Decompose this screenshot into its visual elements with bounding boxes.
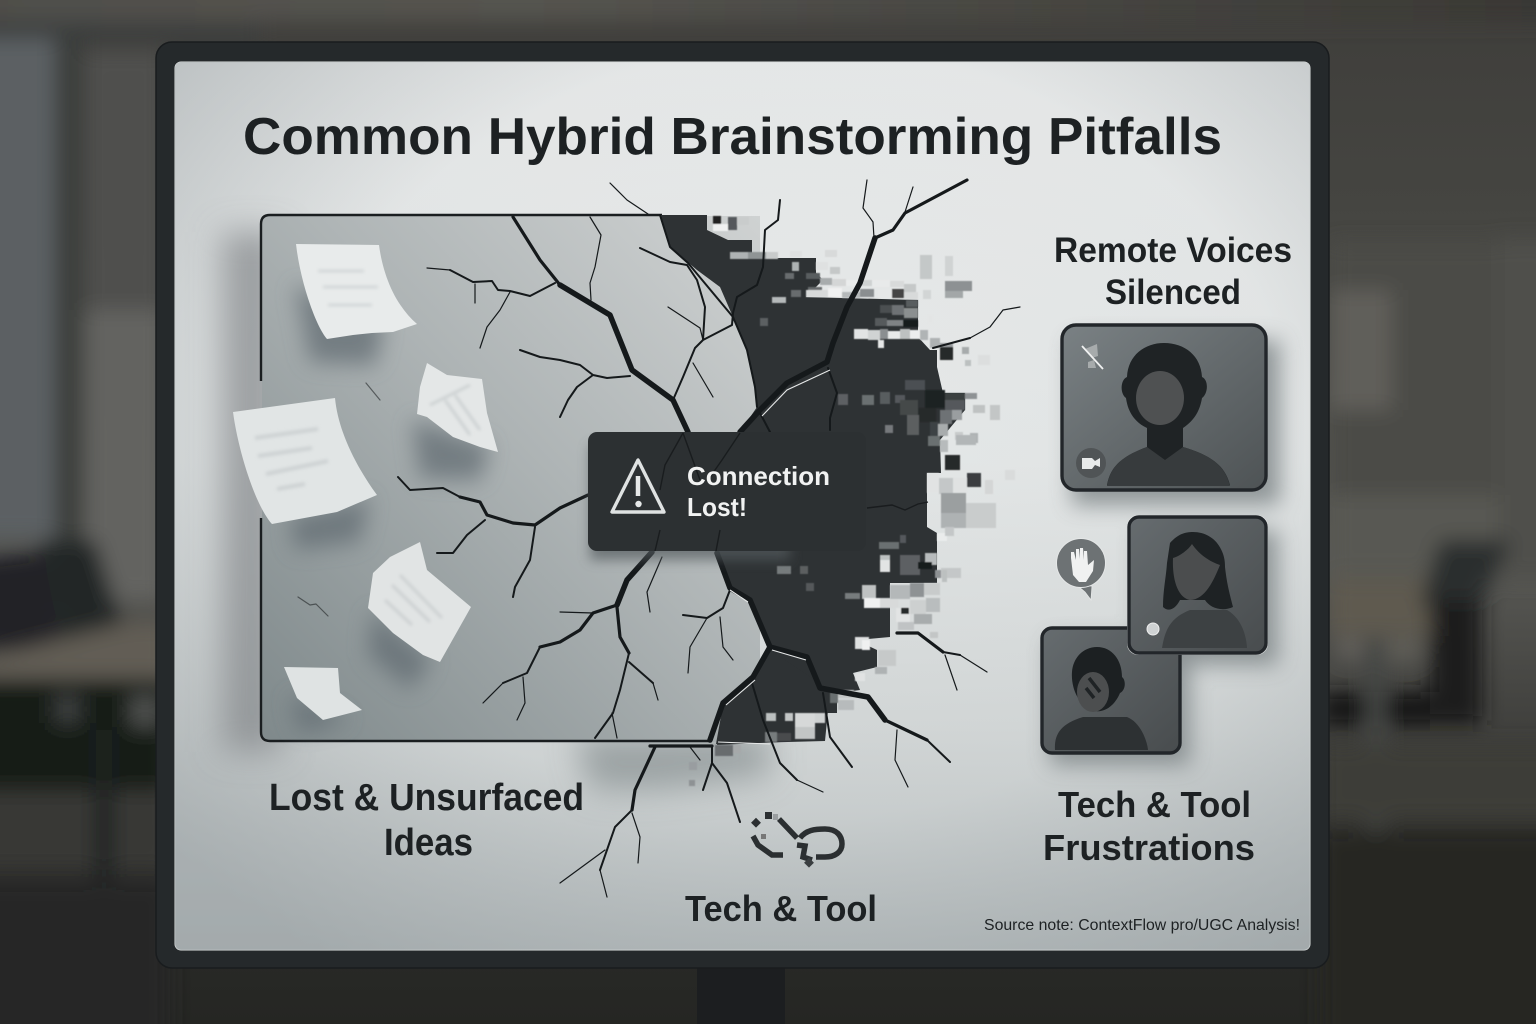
pixelated dark breakdown area [660, 215, 1015, 786]
hairline cracks upper [427, 180, 1020, 397]
card shadows [1050, 340, 1280, 765]
banner text: Lost! [687, 492, 747, 522]
scattered pixels [689, 216, 1015, 786]
label: remote voices silenced: Remote Voices [1054, 231, 1292, 270]
status dot [1147, 623, 1159, 635]
video card: muted person [1062, 325, 1266, 490]
note shadows [290, 285, 490, 732]
whiteboard border [261, 215, 712, 741]
white crack highlights [718, 370, 830, 744]
warning icon [612, 460, 664, 512]
video card: woman [1127, 515, 1268, 655]
crack left of banner [460, 495, 588, 525]
label: tech and tool frustrations: Tech & Tool [1058, 784, 1251, 825]
thick bar under board [650, 744, 712, 748]
label: remote voices silenced: Silenced [1105, 273, 1241, 312]
dark region [660, 215, 965, 745]
person silhouette [1162, 532, 1247, 648]
video card: bottom person [1042, 628, 1180, 753]
main crack left [560, 285, 688, 432]
panel shadow [222, 232, 770, 790]
monitor frame [156, 42, 1329, 968]
banner shadow [590, 445, 790, 560]
monitor screen [175, 62, 1310, 950]
main crack right [740, 238, 875, 432]
sticky note 2 [417, 363, 498, 452]
medium cracks upper [450, 200, 970, 432]
sticky note 3 [233, 398, 377, 524]
icon: broken link [751, 812, 842, 868]
panel: whiteboard with lost ideas [233, 215, 760, 742]
banner body [588, 432, 866, 551]
label: tech and tool frustrations: Frustrations [1043, 827, 1255, 868]
label: tech and tool frustrations [1043, 784, 1255, 868]
banner text [687, 461, 830, 522]
label: lost and unsurfaced ideas [269, 777, 584, 864]
banner: connection lost [588, 432, 928, 551]
lower cracks [617, 552, 885, 740]
label: lost and unsurfaced ideas: Ideas [384, 822, 473, 864]
person silhouette [1055, 647, 1148, 750]
icon: camera off [1076, 448, 1106, 478]
label: remote voices silenced [1054, 231, 1292, 312]
sticky note 5 [284, 667, 362, 720]
small scratches [298, 383, 380, 616]
sticky note 4 [368, 542, 471, 662]
label: tech and tool center: Tech & Tool [685, 888, 877, 929]
source note: Source note: ContextFlow pro/UGC Analysis! [984, 917, 1300, 934]
sticky note 1 [296, 244, 417, 339]
whiteboard surface [262, 216, 760, 742]
title: Common Hybrid Brainstorming Pitfalls [243, 108, 1222, 166]
icon: muted speaker [1082, 344, 1103, 369]
icon: raised hand bubble [1056, 538, 1106, 600]
cracks [398, 180, 1020, 897]
person silhouette [1107, 343, 1230, 486]
dark lower wedge [716, 650, 830, 744]
label: lost and unsurfaced ideas: Lost & Unsurfaced [269, 777, 584, 819]
banner text: Connection [687, 461, 830, 491]
banner crack lines [655, 433, 928, 551]
monitor stand [697, 960, 785, 1024]
